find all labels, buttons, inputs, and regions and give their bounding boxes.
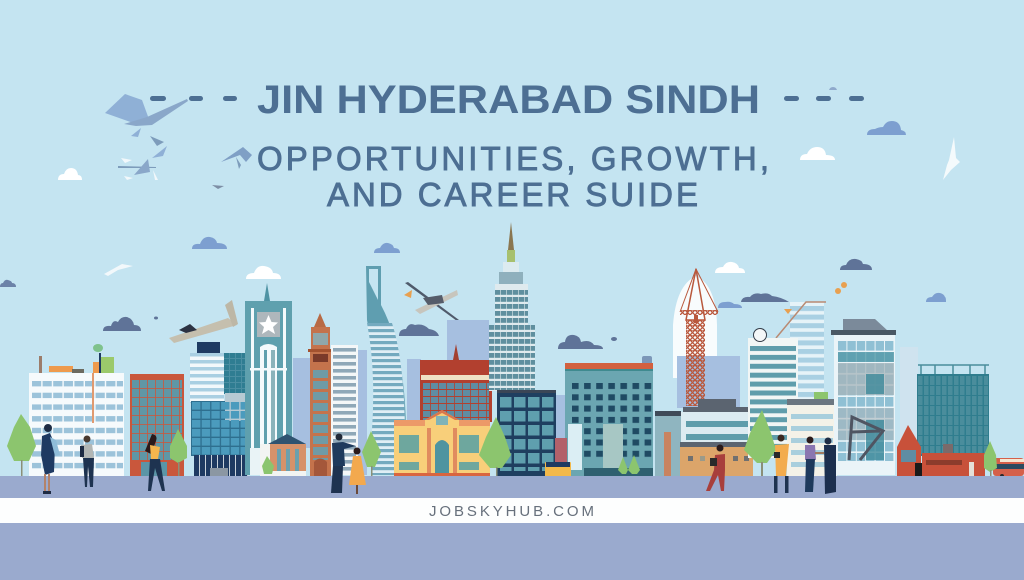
building: teal banded office xyxy=(748,328,798,458)
trees xyxy=(7,410,997,476)
building: columned museum xyxy=(260,434,306,476)
building: teal office with orange roof xyxy=(555,356,653,476)
building: blue glass cluster xyxy=(190,342,250,476)
background lavender blocks xyxy=(293,320,918,475)
building: yellow heritage hall xyxy=(394,410,490,476)
building: white dome xyxy=(673,276,717,378)
person: woman in maroon xyxy=(706,444,725,491)
building: white office block xyxy=(29,344,124,476)
subtitle line one: OPPORTUNITIES, GROWTH, xyxy=(257,140,769,177)
building: teal star tower xyxy=(245,283,292,475)
white footer band xyxy=(0,498,1024,523)
clouds xyxy=(0,121,946,349)
building: dark red heritage block xyxy=(420,344,492,422)
building: teal fin tower xyxy=(917,365,989,456)
person: man in orange xyxy=(774,434,789,493)
website label: JOBSKYHUB.COM xyxy=(429,503,594,520)
flock of planes and birds, upper left xyxy=(105,94,252,189)
orange crane tower xyxy=(680,269,718,406)
person: man in purple shaking hands xyxy=(805,436,824,492)
plane over twisted tower xyxy=(404,282,459,321)
person: woman in orange dress xyxy=(349,448,366,494)
title dashes left xyxy=(150,96,237,101)
person: figure in dark coat xyxy=(824,438,836,494)
building: low block with tan base xyxy=(680,399,753,476)
building: light blue tower and crane arm xyxy=(776,282,847,402)
subtitle line two: AND CAREER SUIDE xyxy=(327,176,698,213)
title dashes right xyxy=(784,87,864,101)
building: navy office xyxy=(497,390,556,476)
building: white striped tower xyxy=(331,345,358,475)
person: woman with yellow top xyxy=(145,434,165,491)
building: red gabled hall xyxy=(897,425,985,476)
small plane left xyxy=(104,264,133,276)
lower base strip xyxy=(0,523,1024,580)
red bus xyxy=(993,458,1024,478)
building: twisted skyscraper xyxy=(366,266,406,475)
building: red brick grid xyxy=(130,374,184,476)
building: glass tower with sculpture xyxy=(831,319,896,475)
white bird upper right xyxy=(943,137,960,180)
plane over teal tower xyxy=(169,300,238,343)
building: brick clock tower xyxy=(308,313,331,476)
person: man with grey top xyxy=(80,436,94,487)
person: man in navy reaching xyxy=(331,434,356,493)
title: JIN HYDERABAD SINDH xyxy=(257,78,760,122)
upper ground strip xyxy=(0,476,1024,498)
building: small grey-blue block xyxy=(655,411,681,476)
person: woman in navy dress xyxy=(41,424,60,494)
yellow bus in street xyxy=(545,462,571,477)
building: cream tower xyxy=(787,392,837,476)
building: spire skyscraper xyxy=(489,222,535,391)
